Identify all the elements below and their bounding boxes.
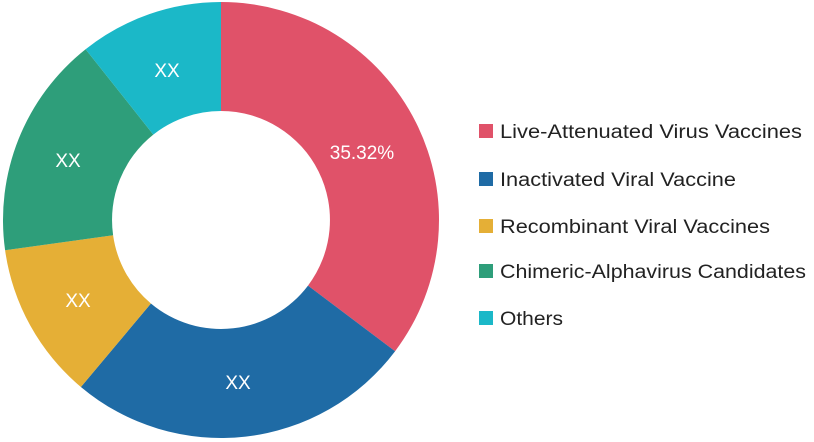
legend item: inactivated: Inactivated Viral Vaccine bbox=[500, 170, 736, 191]
value labels: XX bbox=[225, 373, 251, 394]
value labels: XX bbox=[55, 151, 81, 172]
segment: chimeric bbox=[3, 49, 153, 250]
value labels: 35.32% bbox=[330, 143, 394, 164]
legend item: others: Others bbox=[500, 309, 563, 330]
donut chart bbox=[3, 2, 439, 438]
legend item: live-attenuated: Live-Attenuated Virus Vaccines bbox=[500, 122, 802, 143]
segment: inactivated bbox=[81, 286, 395, 438]
value labels: XX bbox=[65, 291, 91, 312]
legend bbox=[479, 122, 806, 330]
segment: others bbox=[86, 2, 221, 135]
legend item: recombinant: Recombinant Viral Vaccines bbox=[500, 217, 770, 238]
segment: live-attenuated bbox=[221, 2, 439, 351]
segment: recombinant bbox=[5, 235, 151, 387]
value labels: XX bbox=[154, 61, 180, 82]
value labels bbox=[55, 61, 394, 394]
legend item: others bbox=[479, 309, 563, 330]
legend item: chimeric: Chimeric-Alphavirus Candidates bbox=[500, 262, 806, 283]
